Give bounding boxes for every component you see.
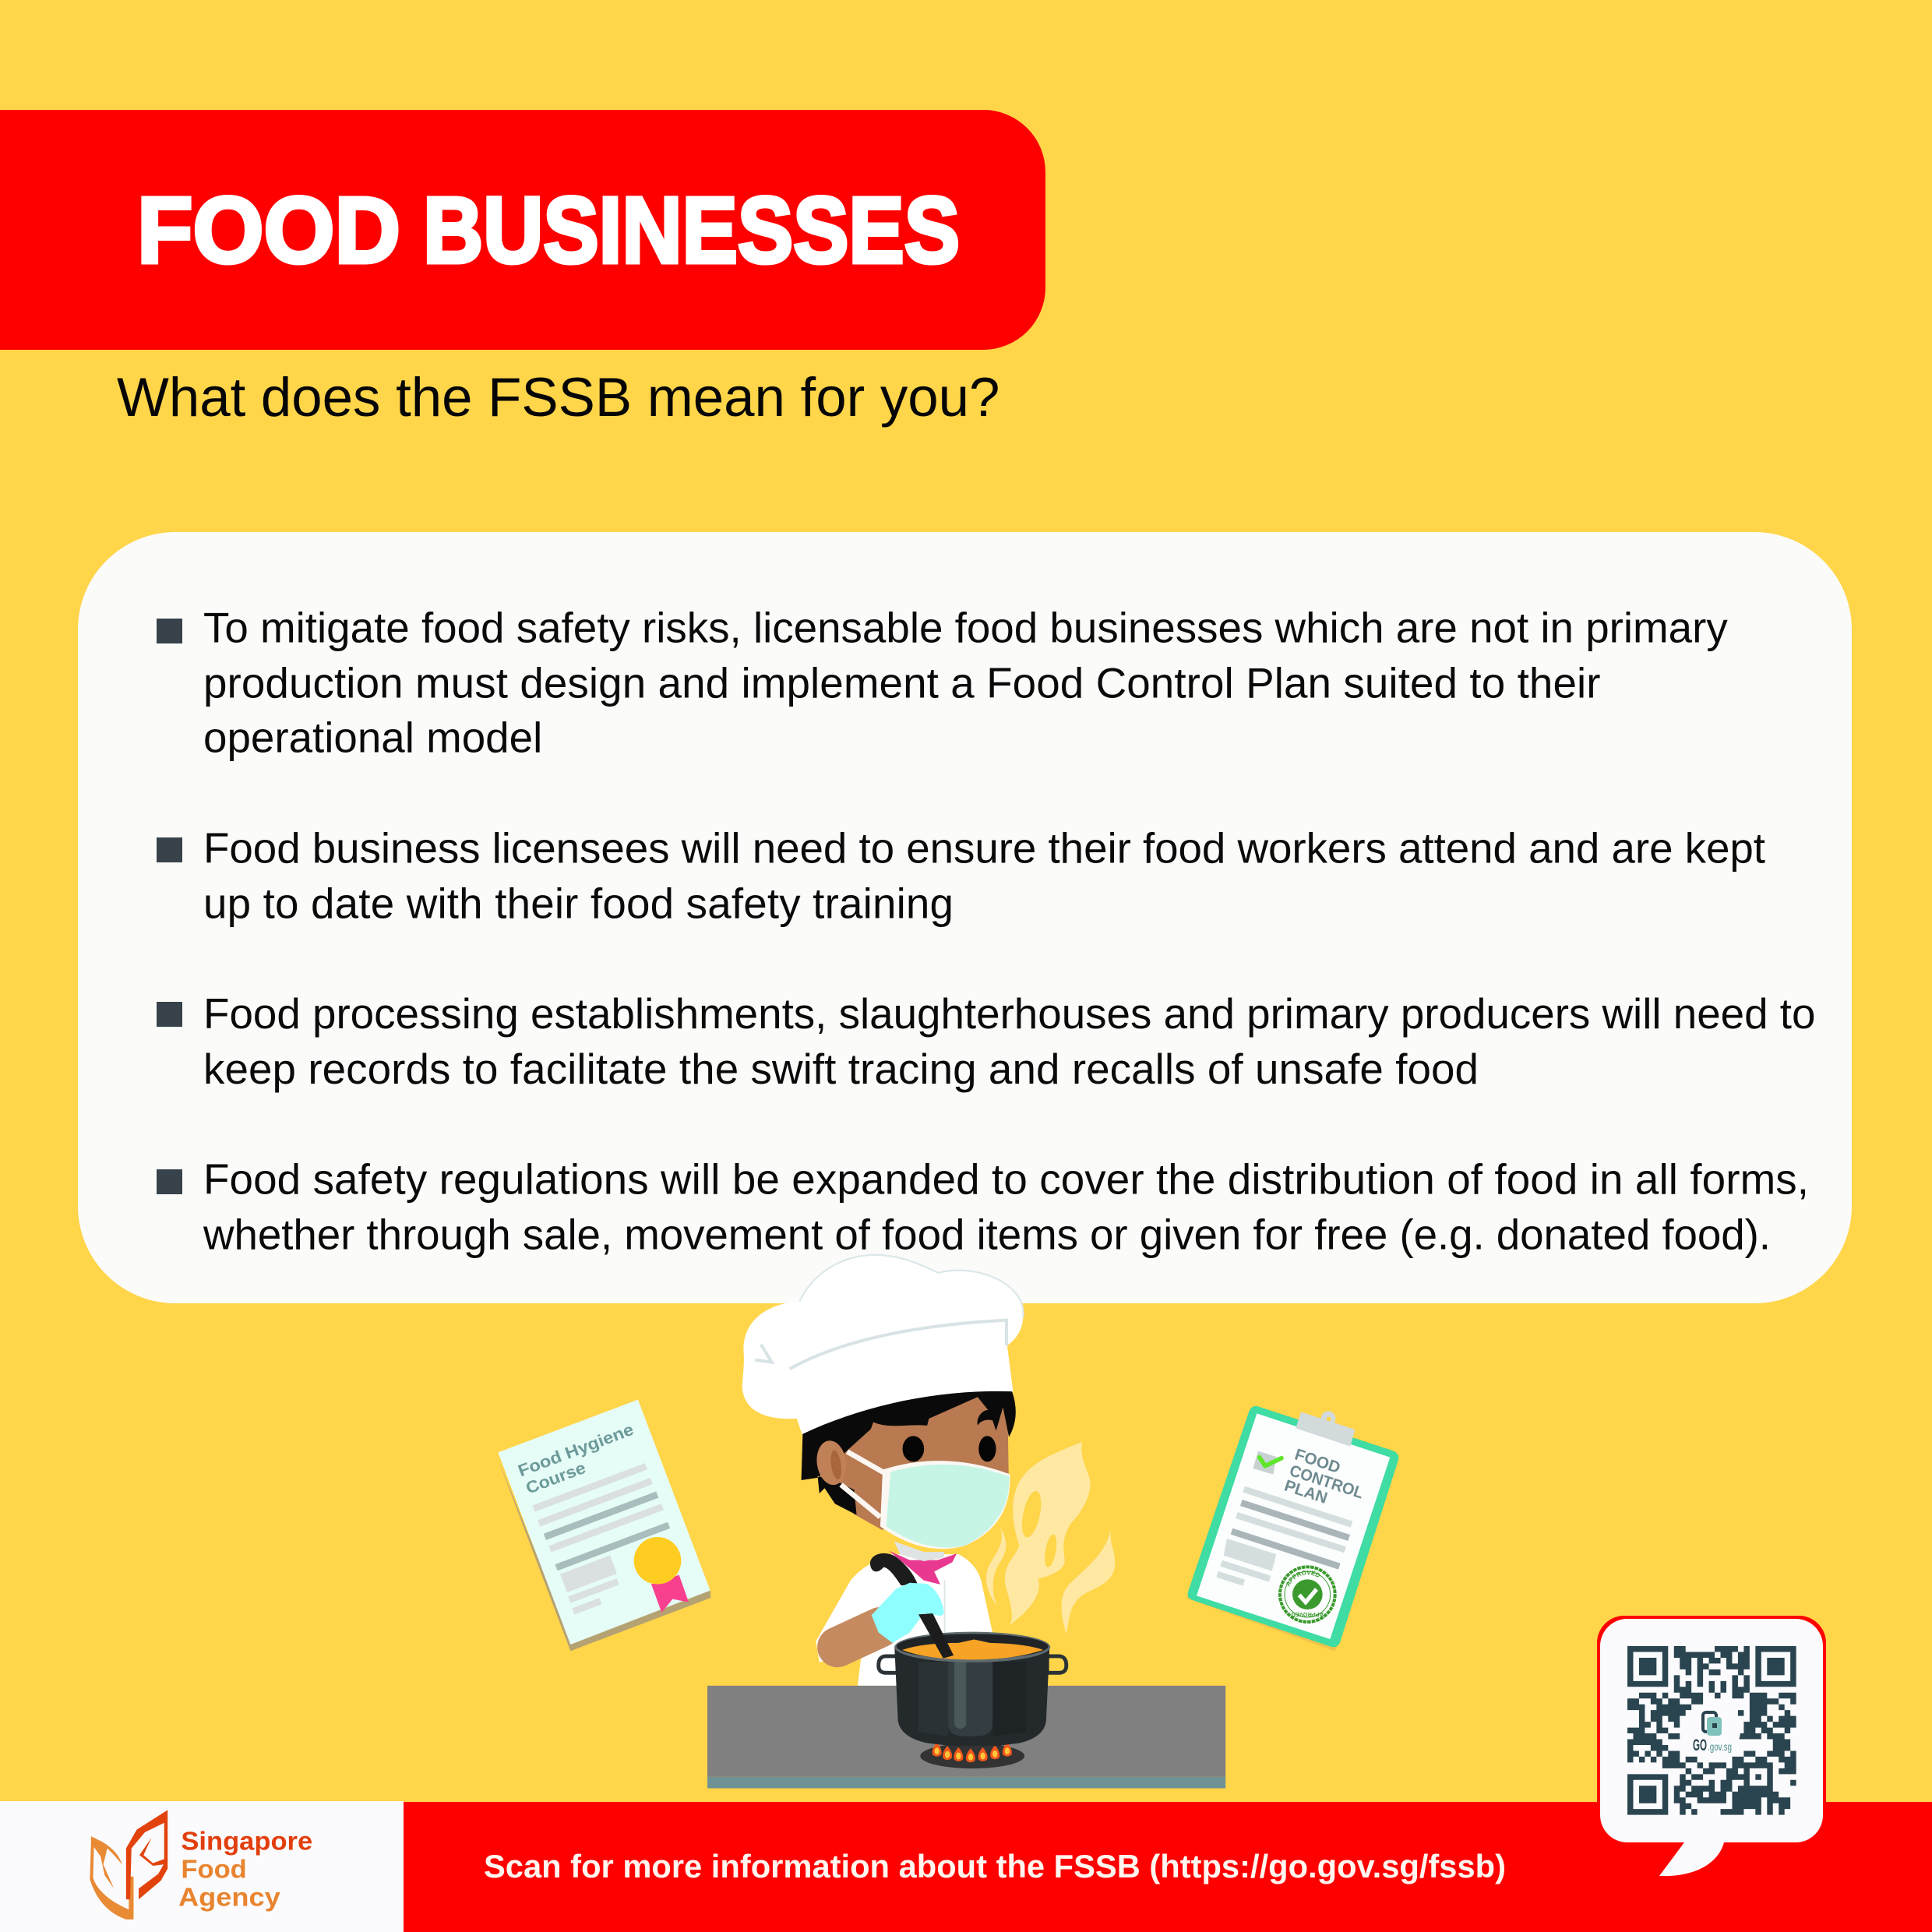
- bullet item 1: operational model: [203, 714, 542, 762]
- bullet item 2: up to date with their food safety training: [203, 879, 954, 927]
- ear: [814, 1439, 849, 1487]
- clipboard title: [1282, 1446, 1366, 1507]
- counter top: [707, 1686, 1225, 1789]
- certificate sheet: [498, 1400, 710, 1645]
- title: FOOD: [137, 177, 400, 283]
- QR centre logo: .gov.sg: [1708, 1740, 1732, 1753]
- logo text: Food: [181, 1855, 247, 1884]
- clipboard title: CONTROL: [1287, 1461, 1366, 1502]
- clipboard board: [1187, 1406, 1398, 1647]
- logo text: Singapore: [181, 1826, 312, 1856]
- title banner: [0, 110, 1045, 350]
- certificate paper edge: [498, 1458, 710, 1651]
- QR finder top left: [1631, 1649, 1666, 1684]
- ribbon seal: [634, 1537, 689, 1613]
- mask straps: [841, 1451, 883, 1517]
- logo text: [178, 1826, 312, 1913]
- chef body: [816, 1554, 993, 1686]
- approved stamp: APPROVED: [1292, 1611, 1324, 1618]
- bullet item 4: whether through sale, movement of food items or given for free (e.g. donated food).: [203, 1211, 1771, 1259]
- clipboard shadow: [1186, 1595, 1338, 1651]
- panel: food business requirements: [78, 532, 1852, 1303]
- glove: [872, 1583, 944, 1643]
- clipboard title: PLAN: [1282, 1477, 1330, 1507]
- logo leaf left: [90, 1836, 133, 1920]
- certificate title: Course: [524, 1458, 588, 1498]
- QR finder centres: [1639, 1658, 1785, 1803]
- cooking pot: [879, 1632, 1066, 1746]
- certificate lines: [532, 1463, 687, 1615]
- bullet item 2: Food business licensees will need to ensure their food workers attend and are kept: [203, 824, 1765, 873]
- clip: [1296, 1411, 1355, 1447]
- clipboard block: [1224, 1539, 1276, 1571]
- chef hat: [742, 1255, 1023, 1434]
- chef head: [802, 1384, 1016, 1549]
- footer bar: [0, 1801, 1932, 1932]
- face mask: [880, 1461, 1010, 1549]
- certificate title: [516, 1420, 643, 1498]
- illustration: food hygiene course certificate: [498, 1400, 710, 1651]
- clipboard paper: [1197, 1413, 1390, 1639]
- bullet item 1: [157, 603, 1728, 762]
- QR finder bottom left: [1631, 1777, 1666, 1812]
- ladle handle lower: [918, 1613, 954, 1659]
- illustration: chef cooking at stove: [707, 1255, 1225, 1789]
- eyes: [902, 1436, 924, 1461]
- stove burner with flames: [920, 1743, 1024, 1768]
- neck scarf: [889, 1542, 957, 1585]
- bullet item 3: keep records to facilitate the swift tracing and recalls of unsafe food: [203, 1045, 1479, 1093]
- bullet item 2: [157, 824, 1765, 927]
- QR finder top right: [1758, 1649, 1793, 1684]
- title: [137, 177, 960, 283]
- hair: [802, 1384, 1016, 1515]
- clipboard lines: [1218, 1490, 1352, 1583]
- steam: [986, 1442, 1115, 1634]
- QR centre logo: GO: [1693, 1736, 1707, 1754]
- jacket seam: [943, 1581, 947, 1633]
- illustration: food control plan clipboard: [1187, 1406, 1399, 1652]
- arm: [837, 1627, 880, 1647]
- logo leaf right: [126, 1810, 167, 1899]
- bullet item 4: Food safety regulations will be expanded to cover the distribution of food in all forms,: [203, 1155, 1809, 1203]
- title: BUSINESSES: [423, 177, 960, 283]
- footer text: Scan for more information about the FSSB (https://go.gov.sg/fssb): [484, 1848, 1506, 1884]
- approved stamp: APPROVED: [1286, 1571, 1320, 1586]
- bullet item 4: [157, 1155, 1809, 1259]
- bullet item 1: To mitigate food safety risks, licensable food businesses which are not in primary: [203, 603, 1728, 651]
- bullet item 3: Food processing establishments, slaughterhouses and primary producers will need to: [203, 989, 1815, 1038]
- subtitle: What does the FSSB mean for you?: [117, 367, 999, 428]
- bullet item 3: [157, 989, 1815, 1093]
- certificate title: Food Hygiene: [516, 1420, 636, 1480]
- approved stamp: [1278, 1565, 1337, 1624]
- QR centre logo: [1684, 1703, 1740, 1759]
- QR code speech bubble: [1597, 1616, 1826, 1876]
- clipboard title: FOOD: [1292, 1446, 1342, 1477]
- QR code: [1627, 1649, 1796, 1812]
- logo text: Agency: [178, 1883, 280, 1913]
- checkbox: [1253, 1451, 1282, 1475]
- logo: Singapore Food Agency: [90, 1810, 312, 1920]
- bullet item 1: production must design and implement a Food Control Plan suited to their: [203, 659, 1600, 707]
- ladle handle upper: [870, 1553, 918, 1585]
